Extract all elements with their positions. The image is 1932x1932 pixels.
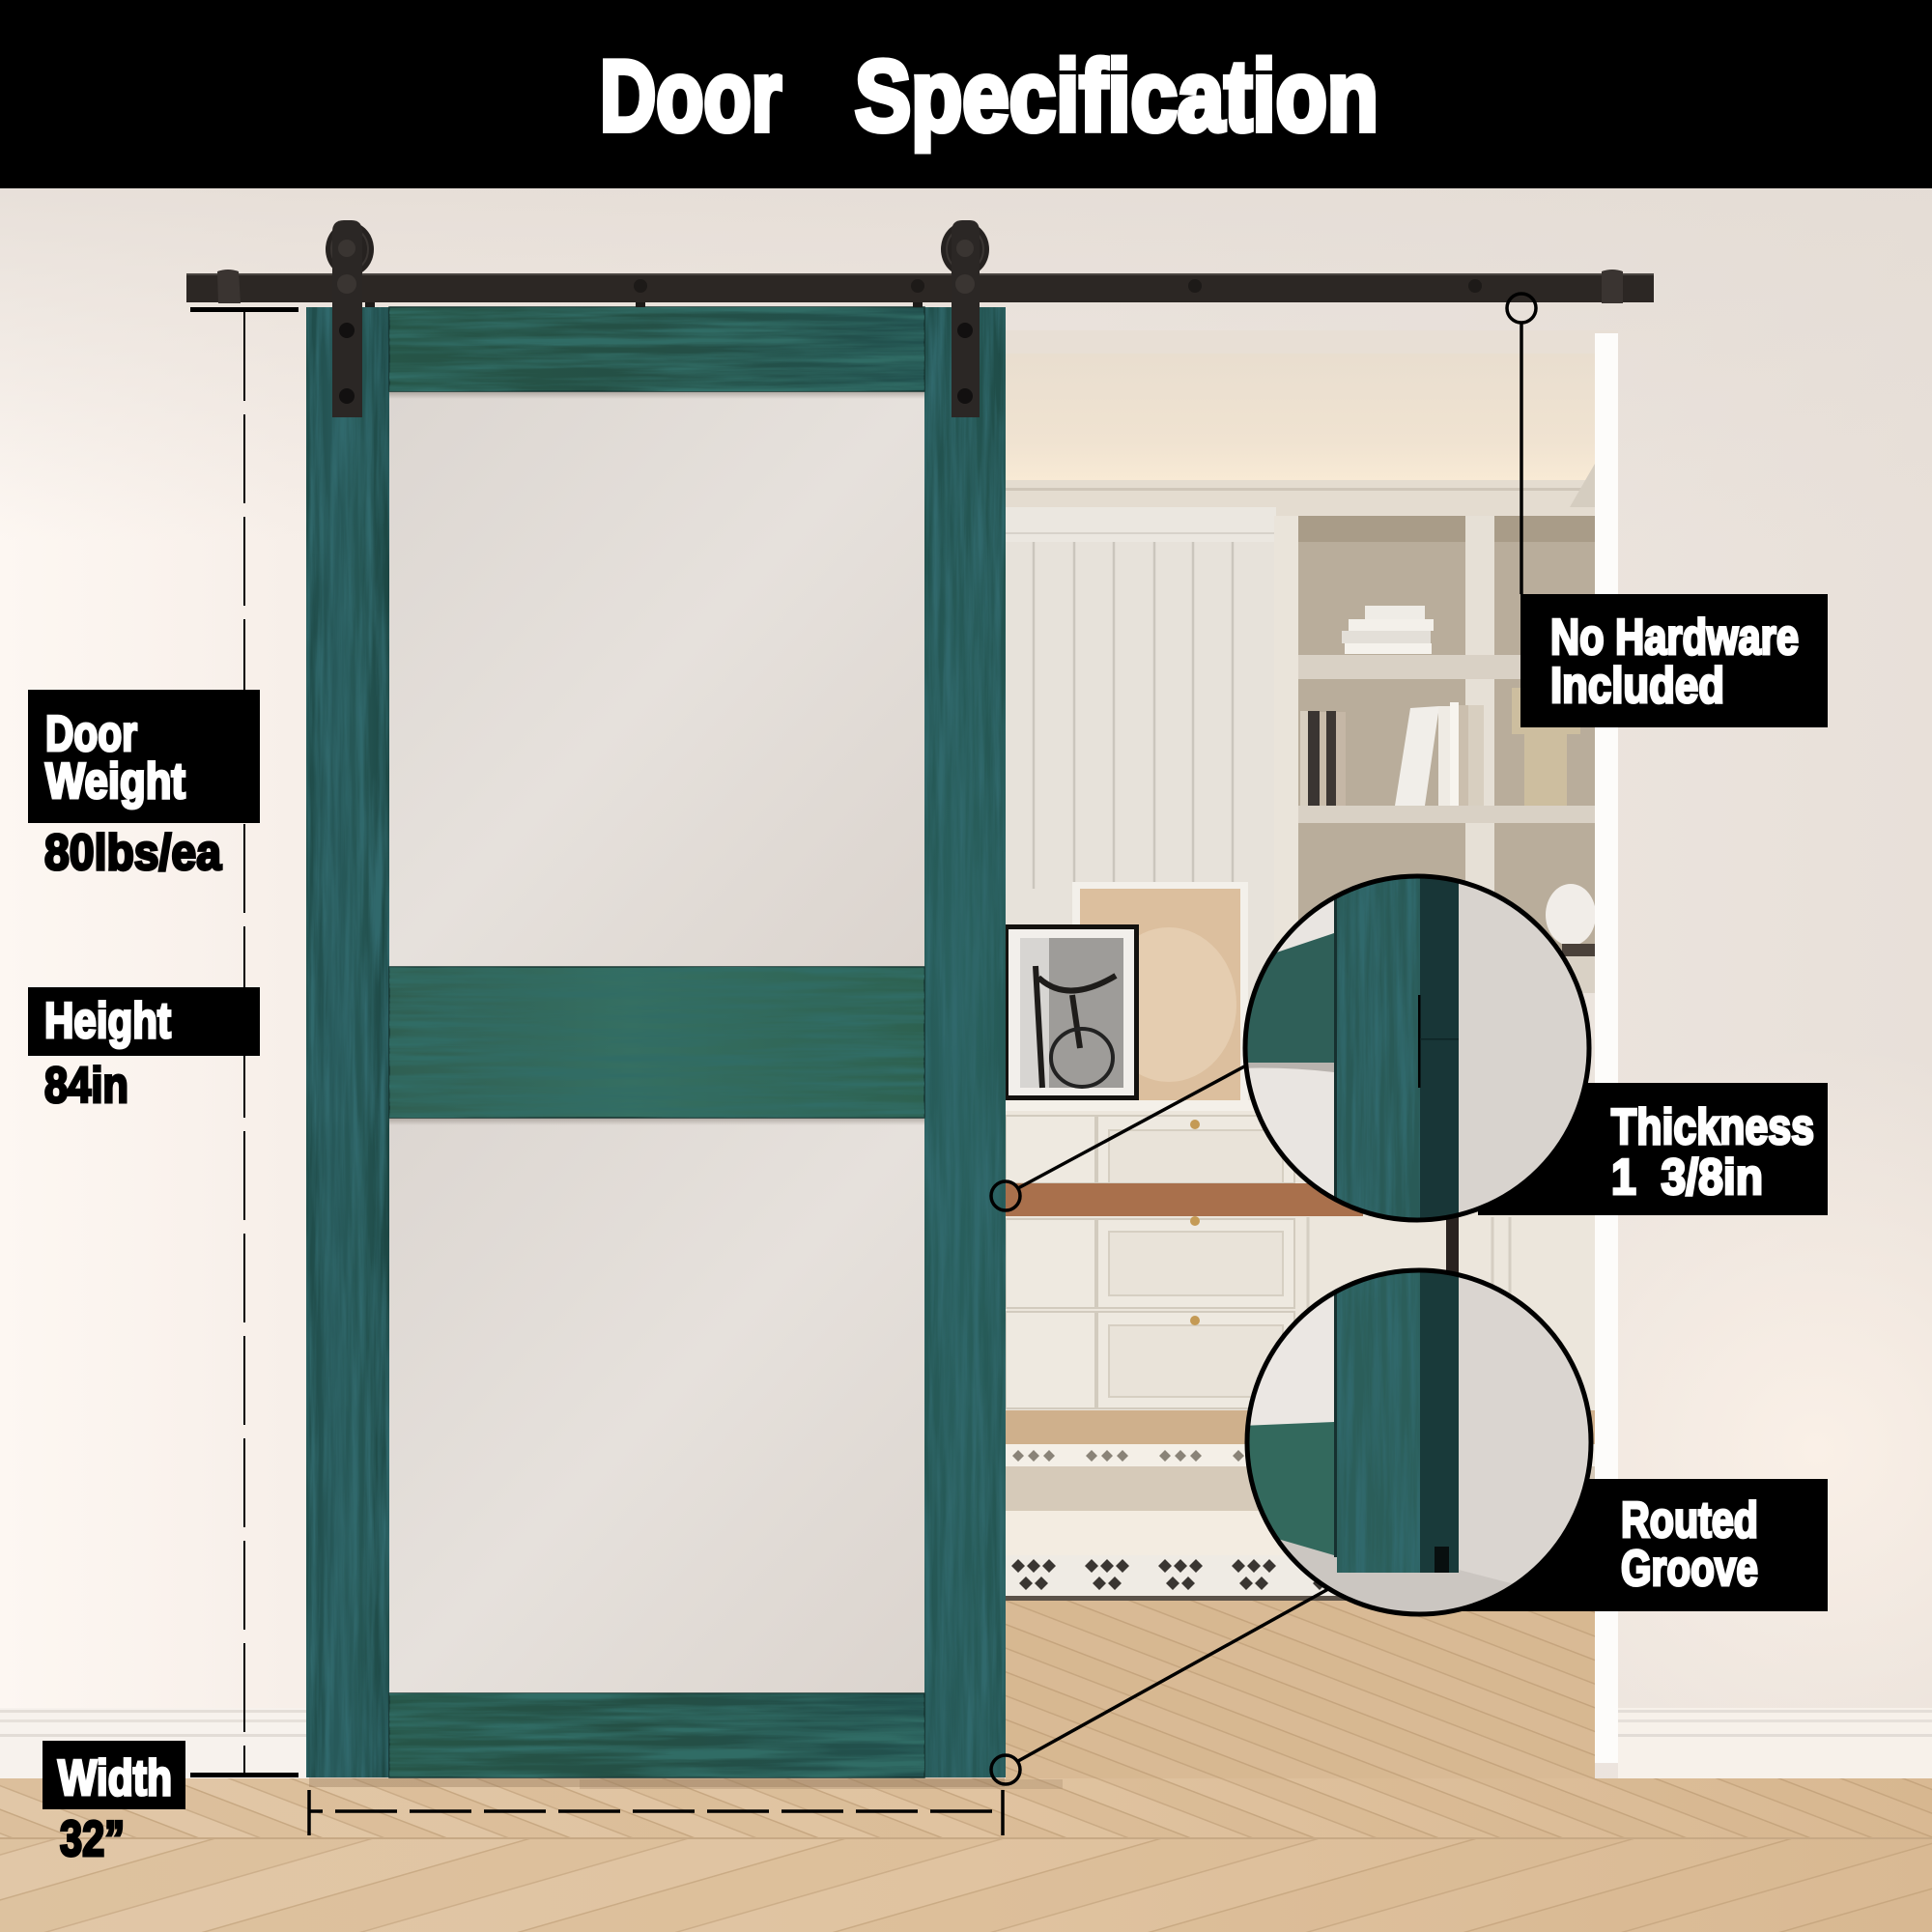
top rail: [389, 307, 924, 391]
dark post seen between circles: [1446, 1212, 1459, 1280]
leaning art print: [1072, 882, 1248, 1104]
glass panel lower: [389, 1118, 924, 1693]
cabinets: [1006, 1100, 1595, 1419]
door shadow on floor: [309, 1777, 1005, 1787]
sliding track hardware: [186, 220, 1654, 417]
label: no hardware included: [1520, 594, 1828, 727]
shadows under rails: [389, 391, 924, 1125]
room floor and rug: [1006, 1410, 1595, 1778]
height dimension line: [190, 307, 298, 1777]
detail circle: routed groove: [1241, 1265, 1604, 1623]
label: door weight: Weight: [45, 753, 185, 810]
label: thickness: 1 3/8in: [1611, 1150, 1763, 1206]
width dimension line: [309, 1790, 1003, 1835]
sculpture: [1512, 688, 1580, 806]
white door casing: [1595, 333, 1618, 1763]
label: door weight: 80lbs/ea: [44, 825, 222, 881]
baseboards: [0, 1708, 1932, 1778]
floor: [0, 1778, 1932, 1932]
ceiling: [1006, 354, 1595, 480]
label: height: Height: [44, 993, 171, 1049]
framed bicycle photo: [1006, 924, 1139, 1100]
label: no hardware included: No Hardware: [1550, 610, 1799, 666]
label: door weight: Door: [45, 706, 137, 762]
label: height: [28, 987, 260, 1114]
label: routed groove: Groove: [1621, 1541, 1758, 1597]
left stop block: [217, 270, 241, 303]
wooden bench top: [1006, 1183, 1363, 1216]
detail circle: door thickness: [1236, 869, 1602, 1227]
right stop block: [1602, 270, 1623, 303]
right stile: [924, 307, 1006, 1777]
header bar: [0, 0, 1932, 188]
label: routed groove: [1449, 1479, 1828, 1611]
label: routed groove: Routed: [1621, 1492, 1758, 1548]
label: height: 84in: [44, 1058, 128, 1114]
label: no hardware included: Included: [1550, 658, 1724, 714]
barn door: [306, 307, 1006, 1787]
upright books: [1300, 702, 1484, 806]
rail: [186, 273, 1654, 302]
soffit: [1006, 330, 1618, 354]
glass panel upper: [389, 391, 924, 967]
title: Specification: [855, 41, 1378, 153]
label: thickness: Thickness: [1611, 1099, 1814, 1155]
bottom rail: [389, 1693, 924, 1777]
title: [600, 41, 1378, 153]
doorway view into the room: [1006, 330, 1618, 1778]
label: width: [43, 1741, 185, 1867]
stacked books: [1342, 606, 1434, 654]
crown moulding: [1006, 480, 1595, 516]
beadboard wall: [1006, 507, 1276, 1125]
label: door weight: [28, 690, 260, 881]
right hanger: [941, 220, 989, 417]
title: Door: [600, 41, 781, 153]
left hanger: [326, 220, 374, 417]
left stile: [306, 307, 389, 1777]
middle rail: [389, 967, 924, 1118]
track bolts: [365, 279, 1482, 307]
label: width: 32”: [60, 1811, 125, 1867]
callout leader lines and marker rings: [991, 294, 1536, 1784]
label: width: Width: [58, 1750, 172, 1806]
label: thickness: [1478, 1083, 1828, 1215]
vase: [1546, 884, 1596, 946]
bookshelf: [1274, 516, 1596, 1134]
